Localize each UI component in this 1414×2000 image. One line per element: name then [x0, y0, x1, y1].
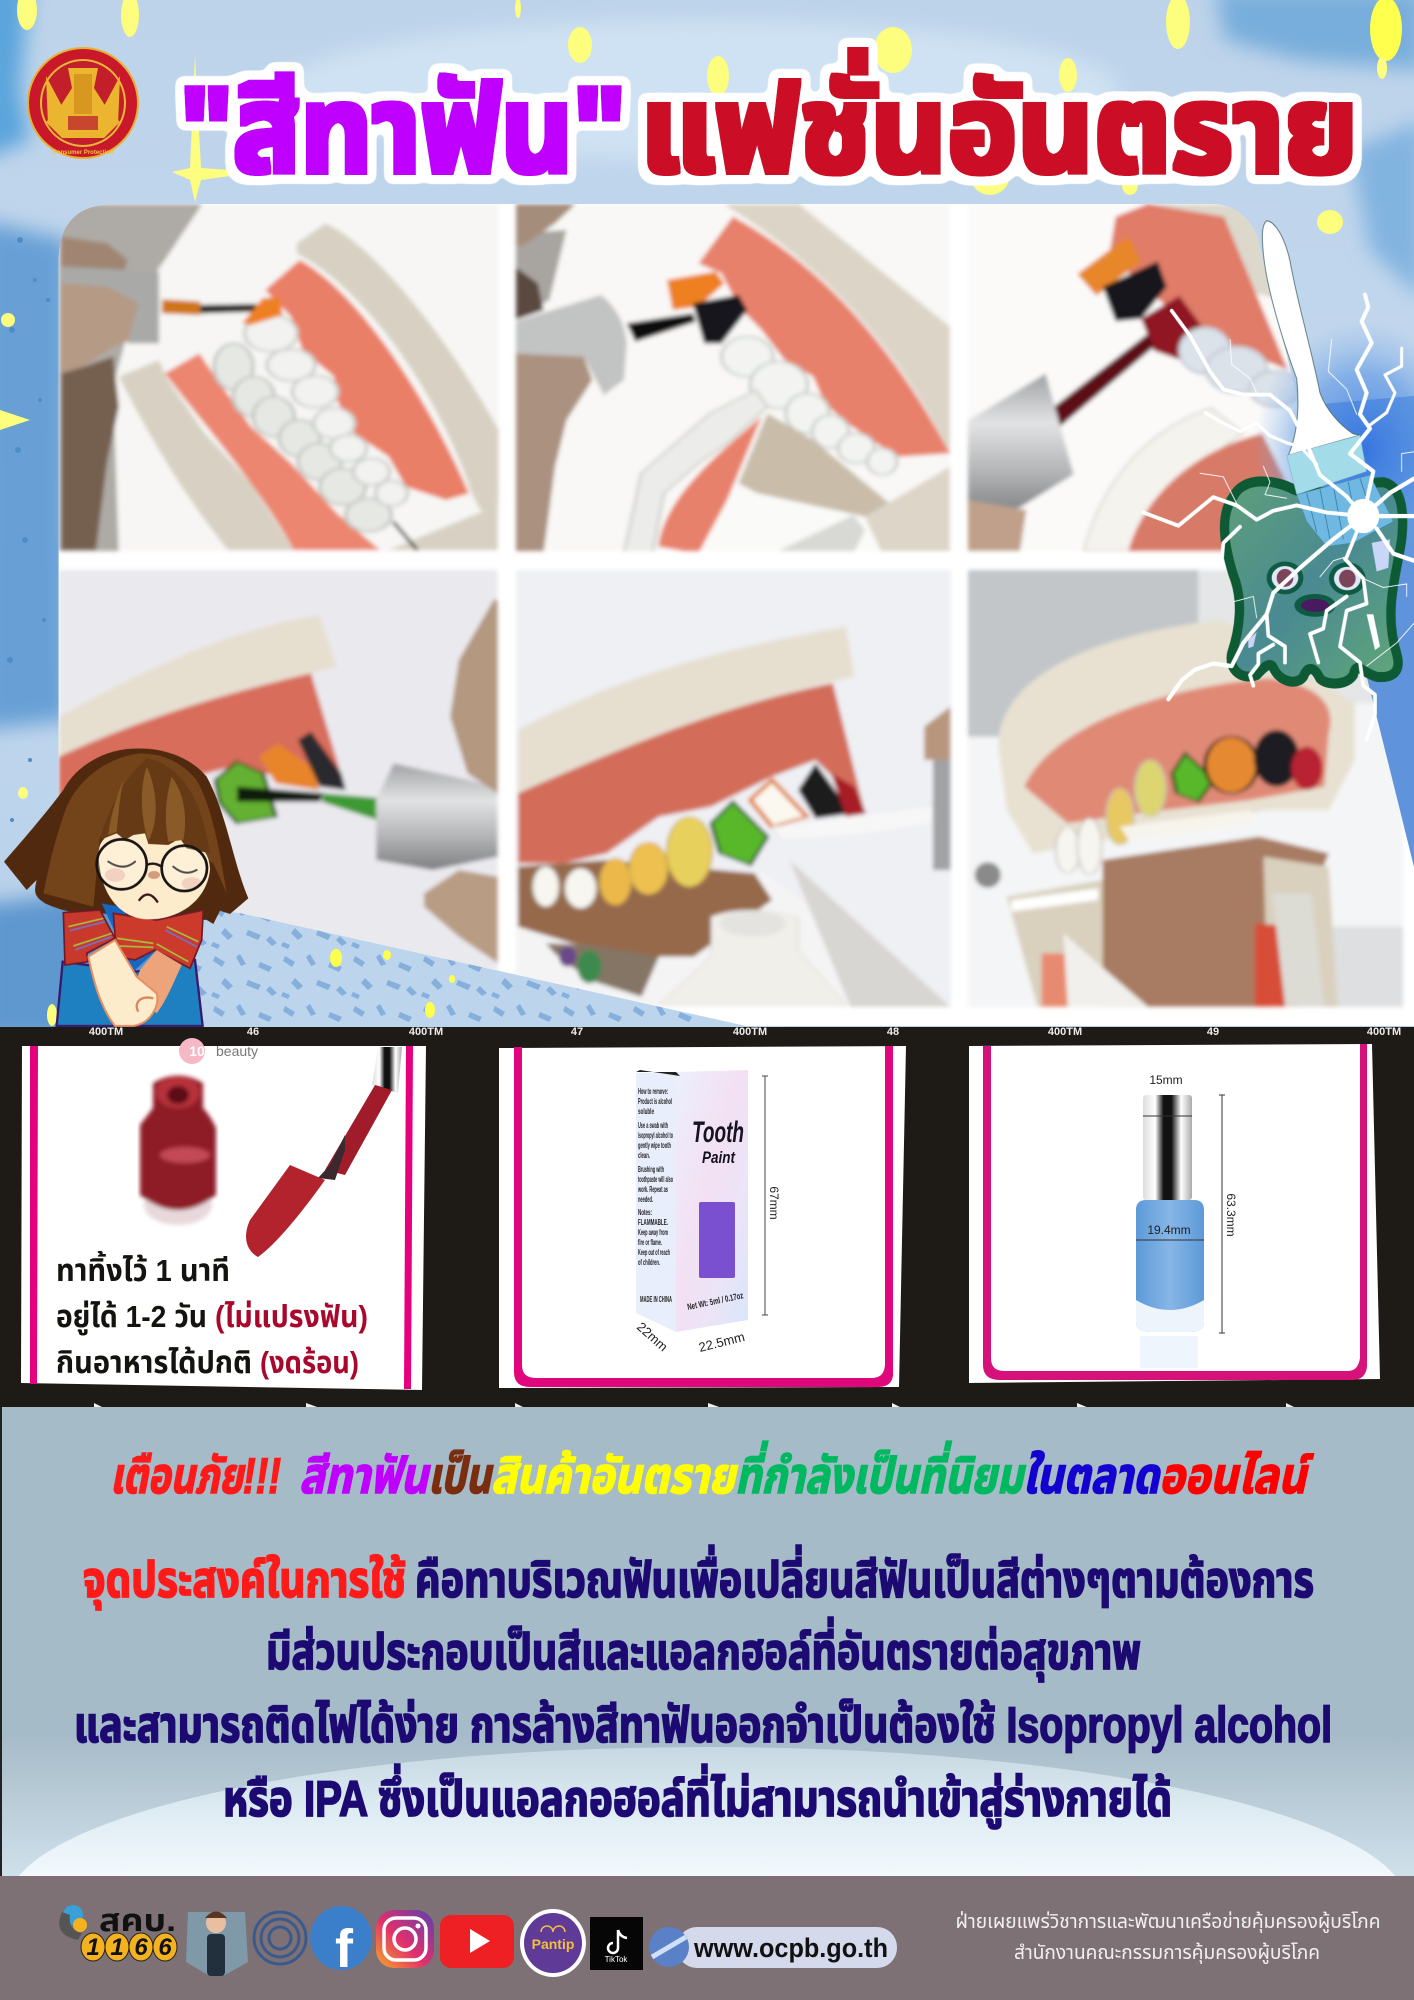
photo 2 [509, 200, 968, 557]
card: tooth paint box: clean. [638, 1151, 650, 1160]
title: red part: แฟชั่นอันตราย [640, 50, 1358, 198]
card text: (งดร้อน) [260, 1345, 359, 1380]
card: tooth paint box: Keep out of reach [638, 1248, 670, 1257]
card: tooth paint box: Product is alcohol [638, 1097, 672, 1106]
card: tooth paint box: toothpaste will also [638, 1175, 673, 1184]
illustration: paint brush and zombie tooth with lightning [1143, 221, 1414, 739]
footer credits [956, 1910, 1380, 1965]
icon: pantip: Pantip [532, 1936, 574, 1952]
logo: OCPB seal: Consumer Protection [52, 150, 114, 156]
card text [56, 1250, 368, 1380]
photo collage: teeth painting [50, 198, 1414, 1033]
film strip labels: 400TM [733, 1026, 767, 1038]
card: tooth paint box: FLAMMABLE. [638, 1218, 668, 1227]
icon: facebook [310, 1906, 372, 1979]
speckle [7, 237, 50, 853]
face [99, 828, 210, 919]
card: tooth paint box: 22.5mm [697, 1329, 746, 1355]
warning headline: เป็น [428, 1448, 494, 1504]
card text: (ไม่แปรงฟัน) [215, 1299, 368, 1334]
warning headline [110, 1441, 1314, 1504]
bottle [140, 1076, 216, 1225]
arms [133, 950, 182, 1013]
photo 6 [955, 560, 1414, 1027]
title [180, 50, 1358, 198]
card: tooth paint box: work. Repeat as [638, 1185, 668, 1194]
warning headline: ที่กำลังเป็นที่นิยม [735, 1441, 1026, 1504]
film strip labels: 400TM [89, 1026, 123, 1038]
icon: tiktok: TikTok [605, 1955, 628, 1964]
film strip labels: 48 [887, 1026, 899, 1038]
card: tooth paint box: Paint [702, 1148, 736, 1167]
lightning [1143, 295, 1414, 739]
icon: person [186, 1912, 248, 1976]
hotline logo: 6 [134, 1934, 148, 1961]
photo 4 [58, 570, 501, 970]
card: tooth paint box: fire or flame. [638, 1238, 662, 1247]
film strip labels: 400TM [1048, 1026, 1082, 1038]
body text: จุดประสงค์ในการใช้ [83, 1552, 406, 1610]
card: tooth paint box: Tooth [692, 1116, 744, 1149]
icon: instagram [376, 1910, 434, 1968]
icon: tiktok [590, 1917, 643, 1970]
hotline logo: 1 [110, 1934, 124, 1961]
film strip labels [89, 1026, 1401, 1038]
warning text panel [0, 1407, 1414, 2000]
card: tooth paint box: Net Wt: 5ml / 0.17oz [686, 1290, 745, 1312]
body text: มีส่วนประกอบเป็นสีและแอลกฮอล์ที่อันตรายต่อสุขภาพ [266, 1617, 1141, 1682]
card: red paint [21, 1038, 426, 1390]
film strip labels: 49 [1207, 1026, 1219, 1038]
yellow splashes [0, 0, 1402, 1026]
card: tooth paint box: needed. [638, 1195, 653, 1204]
card: tooth paint box: gently wipe tooth [638, 1141, 671, 1150]
card: tooth paint box: Use a swab with [638, 1121, 668, 1130]
hotline logo: 6 [158, 1934, 172, 1961]
card text: ทาทิ้งไว้ 1 นาที [56, 1250, 230, 1288]
card: tooth paint box: soluble [638, 1107, 654, 1116]
card: blue bottle [969, 1044, 1380, 1383]
brand mark: beauty [216, 1043, 258, 1059]
brand mark: 10 [189, 1043, 205, 1059]
logo: OCPB seal [28, 48, 138, 158]
brush [1262, 221, 1393, 546]
card: tooth paint box: isopropyl alcohol to [638, 1131, 673, 1140]
card: tooth paint box: Brushing with [638, 1165, 664, 1174]
warning headline: ในตลาด [1023, 1448, 1161, 1504]
icon: agency circle [254, 1912, 306, 1964]
background: watercolor sky [0, 0, 1414, 1040]
hair back [4, 748, 248, 924]
card: tooth paint box: 67mm [767, 1186, 781, 1220]
website pill [649, 1927, 897, 1968]
card: tooth paint box [499, 1046, 906, 1388]
card: tooth paint box: Notes: [638, 1208, 652, 1217]
warning headline: เตือนภัย!!! [110, 1448, 281, 1504]
hotline logo: 1 [86, 1934, 100, 1961]
warning headline: ออนไลน์ [1159, 1448, 1314, 1504]
film strip labels: 46 [247, 1026, 259, 1038]
card text: อยู่ได้ 1-2 วัน [56, 1299, 207, 1335]
brand mark [179, 1038, 258, 1064]
icon: facebook: f [335, 1919, 354, 1979]
title: purple part: "สีทาฟัน" [180, 62, 626, 198]
card: blue bottle: 63.3mm [1224, 1193, 1238, 1237]
film strip labels: 400TM [1367, 1026, 1401, 1038]
card: tooth paint box: of children. [638, 1258, 660, 1267]
shirt [63, 910, 115, 965]
hotline logo: สคบ. [99, 1903, 176, 1938]
body text [74, 1545, 1332, 1829]
footer [0, 1876, 1414, 2000]
warning headline: สีทาฟัน [299, 1448, 431, 1504]
glasses [97, 839, 147, 889]
icon: youtube [440, 1915, 514, 1968]
body text: หรือ IPA ซึ่งเป็นแอลกอฮอล์ที่ไม่สามารถนำเข้าสู่ร่างกายได้ [223, 1764, 1172, 1829]
card: blue bottle: 15mm [1149, 1073, 1183, 1087]
character: sad girl with glasses [4, 748, 248, 1026]
card text: กินอาหารได้ปกติ [56, 1345, 252, 1380]
photo 3 [965, 204, 1298, 554]
footer credits: ฝ่ายเผยแพร่วิชาการและพัฒนาเครือข่ายคุ้มครองผู้บริโภค [956, 1910, 1380, 1934]
film strip labels: 400TM [409, 1026, 443, 1038]
overalls [57, 960, 203, 1026]
film strip labels: 47 [571, 1026, 583, 1038]
photo 5 [511, 560, 963, 1027]
speckled area under collage [150, 890, 800, 1030]
warning headline: สินค้าอันตราย [491, 1448, 738, 1504]
card: tooth paint box: Keep away from [638, 1228, 668, 1237]
card: tooth paint box: How to remove: [638, 1087, 668, 1096]
hotline logo [59, 1903, 177, 1961]
dark product panel [0, 1026, 1414, 1408]
card: tooth paint box: 22mm [634, 1319, 671, 1354]
card: tooth paint box: MADE IN CHINA [640, 1295, 672, 1304]
photo 1 [50, 200, 509, 557]
footer credits: สำนักงานคณะกรรมการคุ้มครองผู้บริโภค [1014, 1941, 1320, 1965]
green tooth [1225, 481, 1403, 684]
website pill: www.ocpb.go.th [693, 1933, 888, 1963]
icon: pantip [520, 1909, 586, 1977]
brush [246, 1047, 402, 1257]
card: blue bottle: 19.4mm [1147, 1223, 1191, 1237]
